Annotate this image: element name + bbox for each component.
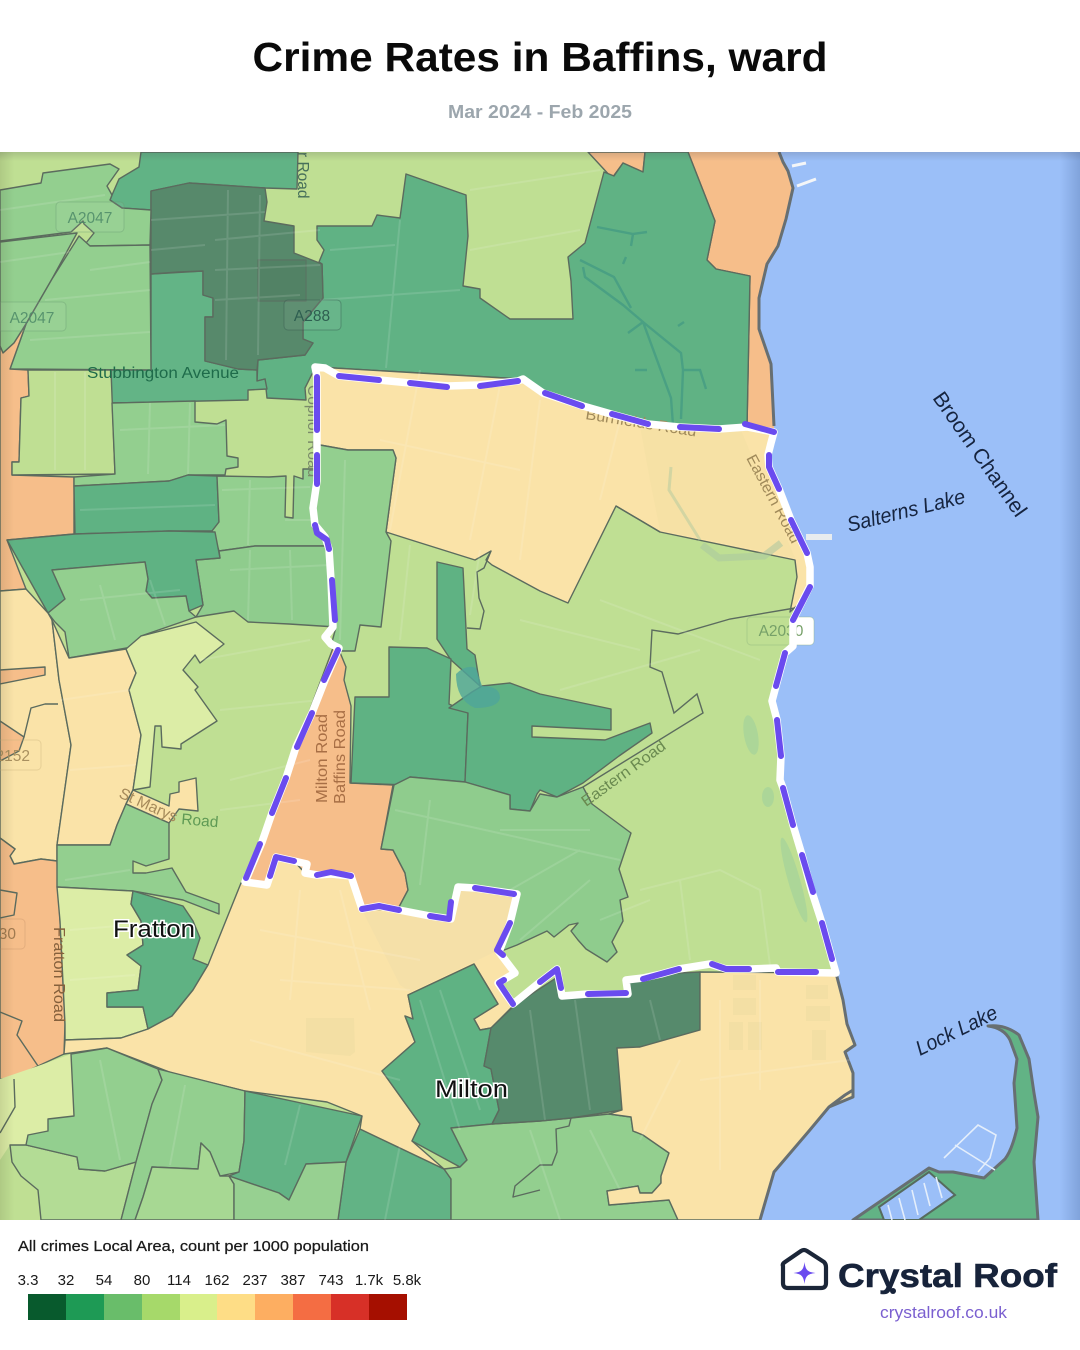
road shield: A2047 north [56,202,124,232]
legend colour ramp [28,1294,407,1320]
road shield: A288: A288 [294,308,330,325]
water label: Salterns Lake: Salterns Lake [845,485,968,537]
area: tinted park [306,1018,355,1056]
road shield: A2030 ward [747,617,814,645]
area: bottom pale 2 [135,1143,234,1220]
area: west mid-light 7 [48,562,196,658]
road shield: A288 [284,300,341,330]
area: Milton green [382,964,499,1167]
road shield: A2152 clipped [0,740,41,770]
area: dark green Fratton [107,891,208,1029]
area: bottom mid-light 2 [121,1069,245,1220]
boundary purple dashes [246,376,832,1004]
area: tinted cream estate [362,889,515,992]
area: west mid-light 2 [0,233,77,353]
legend scale labels: 114 [167,1272,191,1289]
area: west mid-light 3 [10,236,151,370]
ward inner boundary lines [467,506,795,787]
road shield: A2047 north: A2047 [68,210,112,227]
legend scale labels: 237 [242,1272,268,1289]
area: small orange west 1 [0,667,45,684]
area: bottom green 4 [338,1129,451,1220]
logo: Crystal Roof [783,1250,1058,1322]
area: west mid-light 6 [196,546,336,627]
area: mid-light Fratton north [57,804,219,914]
road shield: A2030 clipped west [0,919,25,949]
area: darkest green south [484,972,700,1124]
legend scale labels: 387 [280,1272,306,1289]
area: dotted dark patch [258,260,306,301]
area: cream centre-west [52,620,141,845]
choropleth map [0,152,1080,1220]
label: north road: r Road [294,152,311,199]
land base [0,152,831,1220]
legend scale labels: 54 [96,1272,112,1289]
area: Stubbington strip [111,271,267,403]
area: ward centre block east [449,683,652,811]
label: Stubbington Avenue: Stubbington Avenue [87,365,239,382]
area: ward centre strip dark [437,562,480,686]
area: bottom mid-light 1 [26,1048,162,1171]
icon: y keyhole [890,1288,896,1294]
label: Burrfields Road: Burrfields Road [584,406,698,440]
legend scale labels [18,1272,422,1289]
area: west orange strip [0,324,74,591]
label: St Marys Road: Road [181,811,219,831]
area: ward south mid-light [381,777,631,962]
legend scale labels: 5.8k [393,1272,422,1289]
area: west mid-light 4 [74,401,238,486]
area: west mid-light 1 [0,164,151,246]
area: west dark shape [7,531,220,613]
residential road texture [0,170,850,1220]
area: yellow-green west [126,622,224,790]
area: ward centre block dark [351,647,468,785]
label: St Marys Road [116,785,219,831]
area: west mid-light 5 [212,469,327,551]
legend scale labels: 32 [58,1272,74,1289]
label: Eastern Road south: Eastern Road [578,738,669,810]
water [759,152,1080,1220]
label: Copnor Road: Copnor Road [304,385,321,477]
water feature: streams [580,227,706,425]
area: bottom pale green [10,1145,136,1220]
area: south east buildings [729,975,830,1060]
area: yellow-green Fratton [57,887,148,1040]
legend title: All crimes Local Area, count per 1000 population [18,1238,369,1255]
legend [18,1238,422,1320]
label: Baffins Road: Baffins Road [332,710,349,804]
ward boundary [245,367,836,1004]
area: ward tint [640,426,795,558]
title: Crime Rates in Baffins, ward [252,34,828,80]
area: cream St Marys [126,778,198,823]
label: Eastern Road north: Eastern Road [742,452,803,546]
icon: house with star [783,1250,826,1288]
map edge shading [0,152,1080,1220]
wordmark: Crystal Roof [838,1257,1058,1294]
legend scale labels: 1.7k [355,1272,384,1289]
area: cream west [0,589,71,864]
boundary white casing [245,367,836,1004]
area: orange south west [0,838,65,1079]
legend scale labels: 743 [318,1272,344,1289]
water feature: saltern stream [669,467,781,558]
label: Fratton Road: Fratton Road [50,927,67,1022]
area: Copnor large green [257,152,750,428]
water label: Lock Lake: Lock Lake [912,1001,1001,1060]
area: main cream south [64,859,517,1169]
area: east coast strip orange [688,152,793,432]
area: bottom mid-light east [444,1114,678,1220]
piers [792,163,816,186]
area: bottom green 3 [229,1091,362,1200]
area: ward west mid-light strip [313,445,396,651]
road shield: A2047 west: A2047 [10,310,54,327]
area: west dark band [74,475,219,534]
choropleth areas [0,152,855,1220]
website url: crystalroof.co.uk [880,1304,1008,1322]
water feature: teal lake [456,667,500,708]
area: bottom lower-left light [0,1054,74,1160]
south peninsula [853,1026,1038,1220]
area: south east cream [607,972,855,1220]
road shield: A2030 ward: A2030 [759,623,804,640]
coastline [759,152,855,1220]
legend scale labels: 3.3 [18,1272,38,1289]
area: darkest green north [151,183,323,370]
water label: Broom Channel: Broom Channel [928,388,1031,521]
area: small orange west 2 [0,721,24,761]
area: ward north cream [317,367,810,612]
area: Baffins orange [245,648,408,909]
label: Milton Road: Milton Road [314,714,331,803]
water feature: coastal ponds [741,714,812,924]
marina [879,1172,955,1220]
area: bottom pale 3 [229,1162,346,1220]
legend scale labels: 80 [134,1272,150,1289]
area: north mid green [110,152,298,210]
legend scale labels: 162 [204,1272,230,1289]
subtitle: date range: Mar 2024 - Feb 2025 [448,102,632,122]
place label: Fratton: Fratton [113,916,195,943]
label: St Marys Road: St Marys [116,785,180,826]
road shield: A2047 west [0,302,66,331]
area: top orange wedge [588,152,645,178]
place label: Milton: Milton [435,1076,508,1103]
area: west light rectangle [12,370,115,475]
